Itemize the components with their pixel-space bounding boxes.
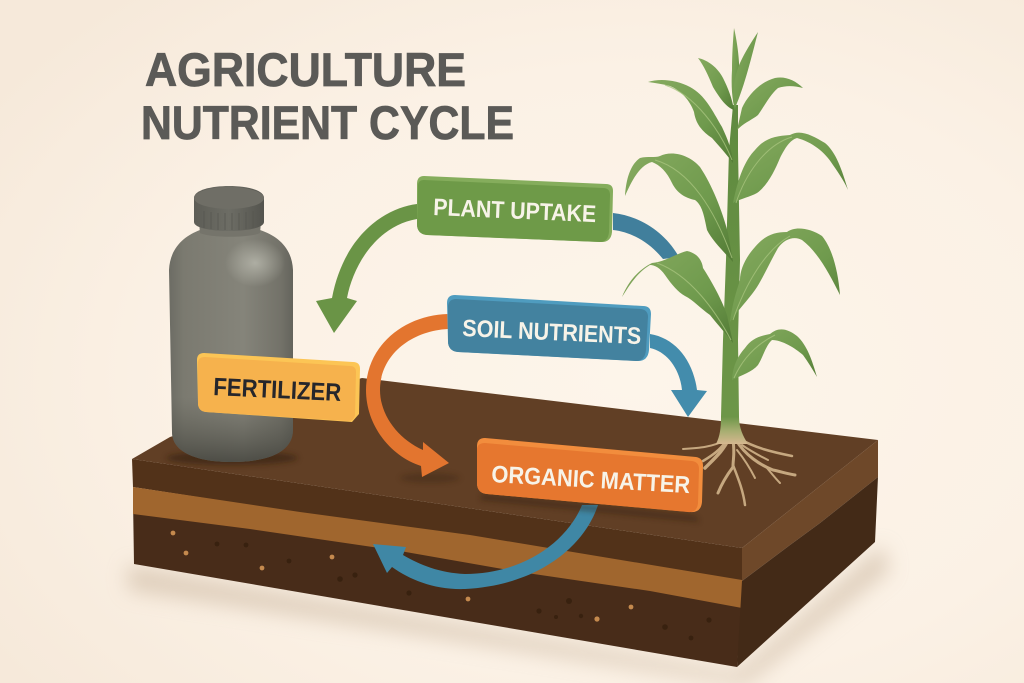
large left leaf [648, 80, 733, 163]
label: plant uptake: PLANT UPTAKE [433, 194, 597, 228]
bottle cap [194, 186, 264, 231]
title: AGRICULTURE [145, 43, 466, 96]
arrow: plant uptake to plant [613, 213, 679, 259]
label: fertilizer: FERTILIZER [213, 373, 342, 407]
label: organic matter [477, 438, 703, 512]
bottle lower shading [170, 300, 293, 462]
bottle body [169, 230, 293, 462]
title: NUTRIENT CYCLE [141, 96, 514, 149]
soil front upper layer [132, 459, 742, 581]
soil block [132, 378, 878, 667]
arrow: soil nutrients to soil [650, 334, 707, 417]
label: organic matter: ORGANIC MATTER [491, 461, 691, 499]
label: soil nutrients: SOIL NUTRIENTS [462, 315, 642, 350]
soil right side lower [737, 477, 878, 667]
leaves [622, 28, 848, 380]
label: soil nutrients [447, 295, 651, 361]
bottle highlight [225, 239, 285, 287]
soil front lower layer [133, 500, 742, 667]
arrow shadow on soil [400, 473, 460, 483]
stem [716, 105, 748, 444]
arrow: organic matter to soil [373, 505, 598, 589]
soil right side upper [742, 440, 878, 581]
top right spike [733, 32, 758, 108]
label: plant uptake [417, 176, 613, 242]
bottle shadow [166, 451, 298, 465]
top spike [732, 28, 739, 110]
soil pebbles [171, 531, 712, 640]
bottle neck [199, 222, 261, 237]
left lower leaf [622, 251, 733, 343]
large right leaf [733, 133, 848, 203]
soil front orange layer [133, 487, 742, 608]
roots [683, 438, 795, 505]
arrow: soil nutrients to organic matter [366, 314, 449, 477]
small left leaf [698, 58, 734, 110]
left droop leaf [625, 153, 733, 262]
leaf midribs [655, 85, 792, 378]
right lower leaf [732, 329, 817, 380]
right middle leaf [730, 229, 840, 322]
small right leaf [737, 77, 803, 130]
title [141, 43, 514, 149]
soil shadow [128, 545, 890, 683]
bottle [166, 186, 298, 465]
soil top face [132, 378, 878, 548]
plant [622, 28, 848, 505]
arrow: plant uptake to fertilizer [316, 204, 417, 333]
shadow: organic matter label [480, 494, 700, 522]
label: fertilizer [197, 353, 360, 422]
